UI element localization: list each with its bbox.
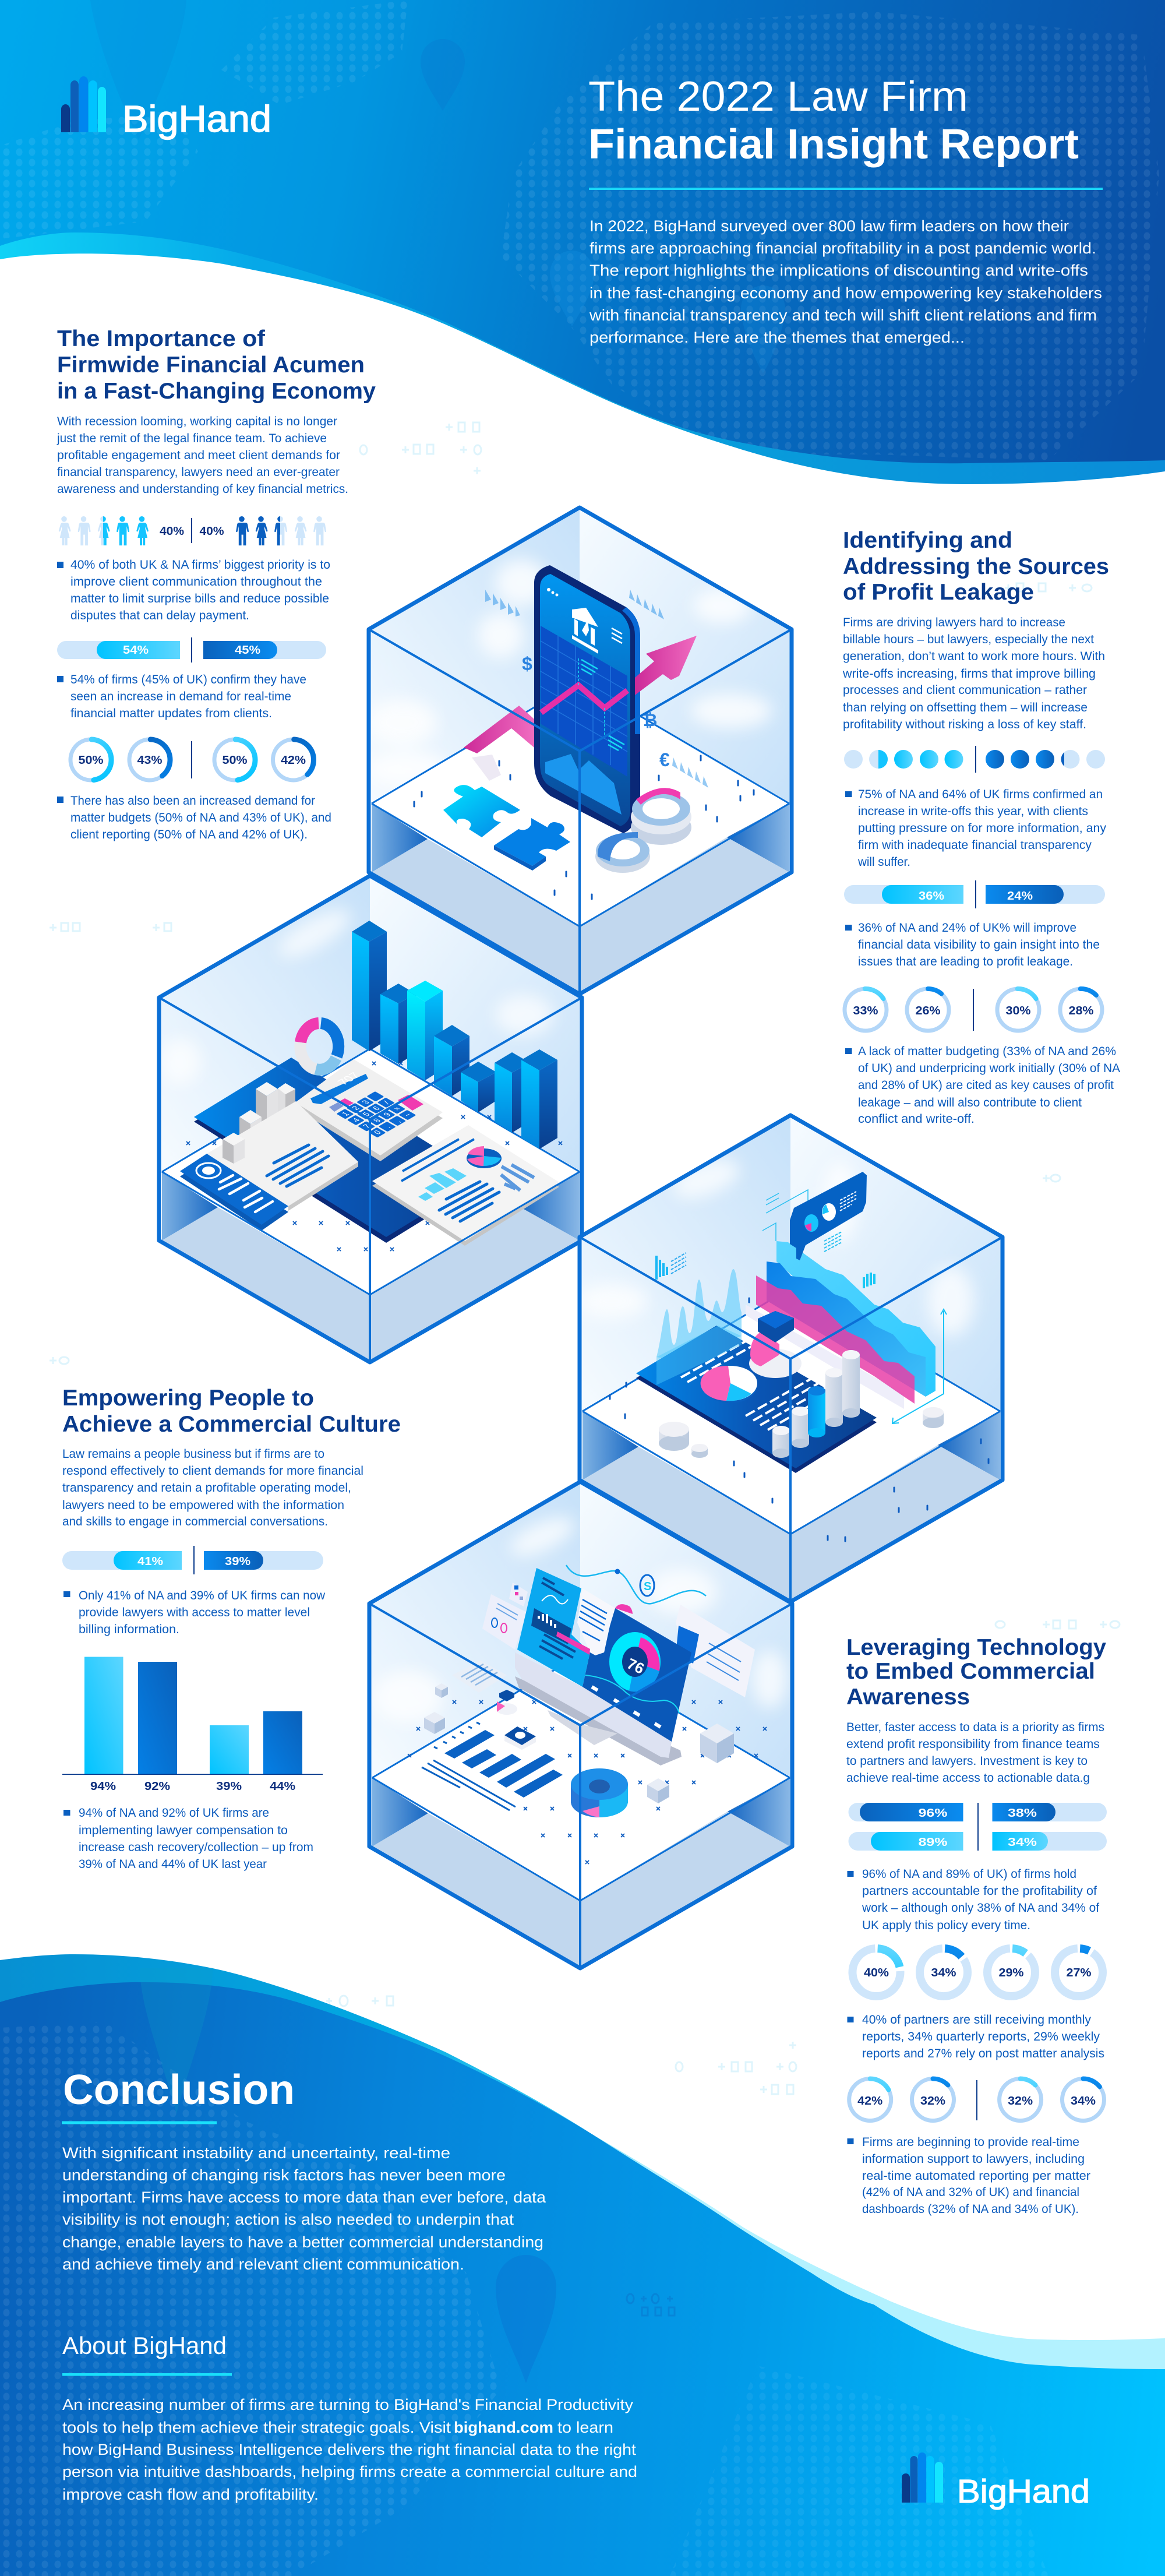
bullet: lawyer compensation: 94% of NA and 92% of UK firms are	[79, 1806, 269, 1820]
bullet: lawyer compensation	[63, 1806, 313, 1871]
heading: Achieve a Commercial Culture	[62, 1412, 401, 1437]
heading	[62, 1386, 401, 1437]
bullet: matter level billing: billing information.	[79, 1623, 179, 1636]
bars 96/89 vs 38/34	[848, 1803, 1107, 1851]
puzzle pieces	[443, 785, 570, 871]
bullet: causes of leakage: A lack of matter budgeting (33% of NA and 26%	[858, 1045, 1116, 1058]
donuts: budgeting and underpricing: 26%	[916, 1005, 941, 1017]
title: Financial Insight Report	[588, 121, 1079, 168]
calculator: −	[402, 1112, 414, 1118]
donuts: budgeting and underpricing	[844, 988, 1103, 1031]
heading	[843, 528, 1109, 605]
column chart: 92%	[144, 1780, 170, 1793]
title rule	[589, 188, 1103, 190]
3D donut	[571, 1768, 628, 1817]
bullet: matter budgets: matter budgets (50% of NA and 43% of UK), and	[70, 811, 331, 824]
heading: to Embed Commercial	[846, 1659, 1095, 1684]
about text: bighand.com	[454, 2419, 553, 2436]
calculator: 1	[340, 1111, 351, 1117]
floor bar chart	[422, 1722, 563, 1810]
logo wordmark: BigHand	[122, 98, 271, 140]
intro text	[846, 1721, 1104, 1785]
intro text: Law remains a people business but if firms are to	[62, 1447, 324, 1461]
intro text: than relying on offsetting them – will increase	[843, 701, 1088, 714]
conclusion text: With significant instability and uncertainty, real-time	[62, 2144, 450, 2162]
intro paragraph: In 2022, BigHand surveyed over 800 law firm leaders on how their	[589, 217, 1069, 235]
right document	[372, 1125, 559, 1246]
conclusion text: and achieve timely and relevant client communication.	[62, 2256, 464, 2273]
logo wordmark: BigHand	[957, 2473, 1090, 2510]
bullet: causes of leakage: conflict and write-off.	[858, 1112, 975, 1126]
column chart: 94%	[90, 1780, 116, 1793]
donuts: report frequency: 27%	[1066, 1967, 1092, 1979]
grey 3D bars	[239, 1082, 295, 1154]
bar 54% vs 45%	[57, 637, 326, 662]
bullet: partner reports: reports and 27% rely on post matter analysis	[862, 2047, 1104, 2060]
bullet: real-time support: (42% of NA and 32% of UK) and financial	[862, 2186, 1079, 2199]
bar 54% vs 45%: 54%	[123, 644, 149, 657]
intro text: generation, don’t want to work more hours. With	[843, 650, 1105, 663]
conclusion rule	[62, 2121, 217, 2124]
title: The 2022 Law Firm	[588, 73, 968, 120]
header white wave	[0, 253, 1165, 2039]
wave line with coin: S	[644, 1580, 651, 1593]
bullet: causes of leakage	[845, 1045, 1120, 1126]
conclusion heading: Conclusion	[63, 2067, 295, 2113]
about text: how BigHand Business Intelligence delivers the right financial data to the right	[62, 2441, 637, 2458]
bullet: matter level billing: Only 41% of NA and 39% of UK firms can now	[79, 1589, 326, 1602]
donuts: budgets and reporting: 50%	[78, 754, 104, 767]
intro paragraph: in the fast-changing economy and how empowering key stakeholders	[589, 284, 1102, 302]
cylinders	[659, 1350, 944, 1458]
donuts: budgets and reporting: 43%	[137, 754, 163, 767]
bullet: partner accountability: work – although only 38% of NA and 34% of	[862, 1901, 1099, 1915]
small wall charts	[656, 1190, 874, 1288]
heading: The Importance of	[57, 326, 266, 351]
donuts: real-time information: 42%	[857, 2095, 882, 2108]
heading: Awareness	[846, 1685, 970, 1710]
bullet: real-time updates: seen an increase in demand for real-time	[70, 690, 291, 703]
decorative marks	[50, 422, 1120, 2094]
bullet: real-time support: real-time automated reporting per matter	[862, 2169, 1090, 2183]
calculator: 5	[361, 1111, 372, 1118]
column chart	[62, 1657, 323, 1793]
donuts: budgets and reporting: 50%	[223, 754, 248, 767]
bars 96/89 vs 38/34: 96%	[918, 1807, 948, 1820]
currency symbols: €	[659, 749, 670, 770]
calculator: .	[383, 1124, 392, 1129]
logo bottom	[902, 2452, 1090, 2510]
speech bubble	[790, 1172, 867, 1260]
donuts: real-time information: 34%	[1071, 2095, 1096, 2108]
donuts: report frequency	[851, 1939, 1112, 2006]
side cards	[482, 1583, 755, 1697]
money note	[504, 1726, 536, 1750]
conclusion text: visibility is not enough; action is also needed to underpin that	[62, 2211, 514, 2228]
about text: person via intuitive dashboards, helping firms create a commercial culture and	[62, 2463, 637, 2480]
bullet: partner reports: reports, 34% quarterly reports, 29% weekly	[862, 2030, 1100, 2043]
donuts: budgets and reporting	[70, 739, 315, 781]
intro text: processes and client communication – rather	[843, 683, 1087, 697]
about text	[62, 2396, 637, 2503]
isometric cube: tablet with layered charts	[578, 1115, 1002, 1602]
bullet: matter budgets: There has also been an increased demand for	[70, 794, 315, 808]
intro paragraph: performance. Here are the themes that emerged...	[589, 329, 965, 346]
intro text: to partners and lawyers. Investment is key to	[846, 1754, 1088, 1768]
bullet: real-time support: dashboards (32% of NA and 34% of UK).	[862, 2203, 1079, 2216]
people pictogram 40%: 40%	[199, 525, 224, 538]
bar 36% vs 24%: 24%	[1007, 890, 1033, 903]
bullet: partner accountability	[847, 1867, 1099, 1932]
logo bars	[61, 76, 106, 132]
about heading: About BigHand	[62, 2332, 227, 2359]
calculator: 9	[381, 1111, 393, 1118]
calculator: 0	[372, 1129, 383, 1136]
panel: commercial culture	[62, 1386, 401, 1871]
footer background	[0, 1968, 1165, 2576]
bullet: client communication: disputes that can delay payment.	[70, 609, 249, 622]
bullet: write-offs	[845, 788, 1107, 869]
about rule	[62, 2373, 232, 2376]
isometric cube: bar charts and calculator	[159, 876, 582, 1362]
about text: to learn	[557, 2419, 613, 2436]
bullet: causes of leakage: of UK) and underpricing work initially (30% of NA	[858, 1062, 1120, 1075]
pink arrow head	[635, 636, 697, 695]
title	[588, 73, 1079, 168]
bar 36% vs 24%	[844, 880, 1105, 908]
donuts: real-time information: 32%	[920, 2095, 945, 2108]
calculator: 7	[361, 1123, 372, 1129]
bullet: matter level billing	[63, 1589, 326, 1636]
bar 54% vs 45%: 45%	[235, 644, 260, 657]
bullet: data visibility	[845, 921, 1100, 968]
bullet: matter level billing: provide lawyers with access to matter level	[79, 1606, 310, 1619]
intro paragraph	[589, 217, 1102, 346]
stacked rings	[595, 788, 691, 873]
bullet: lawyer compensation: increase cash recovery/collection – up from	[79, 1841, 313, 1854]
bullet: lawyer compensation: implementing lawyer compensation to	[79, 1824, 288, 1837]
column chart: 39%	[216, 1780, 242, 1793]
left document	[180, 1101, 358, 1231]
donuts: budgeting and underpricing: 33%	[853, 1005, 878, 1017]
currency symbols	[522, 653, 670, 770]
conclusion text: understanding of changing risk factors has never been more	[62, 2166, 506, 2184]
heading: Addressing the Sources	[843, 554, 1109, 579]
axis arrows	[892, 1309, 947, 1423]
intro text: write-offs increasing, firms that improve billing	[842, 667, 1096, 681]
bullet: client communication: improve client communication throughout the	[70, 575, 322, 589]
intro text: respond effectively to client demands for more financial	[62, 1464, 363, 1478]
bullet: real-time support	[847, 2135, 1090, 2216]
heading: in a Fast-Changing Economy	[57, 379, 376, 404]
panel: technology	[846, 1635, 1112, 2216]
calculator: 2	[350, 1105, 361, 1111]
header background	[0, 0, 1165, 524]
intro paragraph: The report highlights the implications of discounting and write-offs	[589, 262, 1088, 279]
intro text: achieve real-time access to actionable data.g	[846, 1771, 1090, 1785]
intro text: financial transparency, lawyers need an ever-greater	[57, 466, 340, 479]
grey cubes	[424, 1683, 734, 1803]
dots 75% vs 64%	[844, 746, 1105, 773]
donuts: real-time information: 32%	[1008, 2095, 1033, 2108]
bullet: causes of leakage: leakage – and will also contribute to client	[858, 1096, 1082, 1109]
donuts: budgeting and underpricing: 28%	[1068, 1005, 1094, 1017]
bullet: partner accountability: partners accountable for the profitability of	[862, 1884, 1097, 1898]
donuts: report frequency: 34%	[931, 1967, 956, 1979]
calculator: /	[382, 1100, 391, 1105]
panel: profit leakage	[842, 528, 1120, 1126]
isometric cube: monitor dashboard	[369, 1482, 792, 1968]
phone	[534, 565, 640, 833]
heading	[57, 326, 376, 404]
bar 41% vs 39%	[62, 1546, 323, 1574]
calculator: 6	[370, 1105, 382, 1112]
small triangles	[485, 590, 708, 788]
bullet: matter budgets	[57, 794, 331, 841]
people pictogram 40%	[59, 516, 326, 545]
donuts: report frequency: 40%	[864, 1967, 889, 1979]
bar 36% vs 24%: 36%	[919, 890, 944, 903]
intro paragraph: firms are approaching financial profitability in a post pandemic world.	[589, 239, 1096, 257]
bullet: partner accountability: 96% of NA and 89% of UK) of firms hold	[862, 1867, 1076, 1881]
tablet	[636, 1326, 877, 1473]
bullet: client communication	[57, 558, 330, 622]
bullet: write-offs: putting pressure on for more information, any	[858, 822, 1107, 835]
translucent peak chart	[656, 1269, 742, 1360]
intro text: transparency and retain a profitable operating model,	[62, 1481, 351, 1495]
calculator	[295, 1059, 443, 1161]
intro text	[57, 415, 348, 496]
bars 96/89 vs 38/34: 89%	[918, 1836, 948, 1849]
heading: of Profit Leakage	[843, 580, 1034, 605]
intro text	[62, 1447, 363, 1528]
footer wave band	[0, 1954, 1165, 2447]
bullet: partner reports	[847, 2013, 1104, 2060]
wave line with coin	[566, 1565, 706, 1604]
people pictogram 40%: 40%	[160, 525, 184, 538]
donuts: real-time information	[849, 2079, 1104, 2121]
layered area charts	[746, 1241, 935, 1409]
floor marks	[186, 1062, 562, 1251]
tablet base	[194, 1058, 483, 1243]
donuts: budgeting and underpricing: 30%	[1005, 1005, 1031, 1017]
logo top	[61, 76, 271, 140]
heading: Identifying and	[843, 528, 1012, 553]
calculator: ×	[391, 1105, 403, 1112]
about text: improve cash flow and profitability.	[62, 2486, 319, 2503]
calculator: 8	[371, 1117, 383, 1123]
intro text: and skills to engage in commercial conversations.	[62, 1515, 328, 1528]
bullet: write-offs: increase in write-offs this year, with clients	[858, 805, 1088, 818]
floor ticks	[414, 756, 754, 899]
about text: An increasing number of firms are turning to BigHand's Financial Productivity	[62, 2396, 634, 2413]
calculator: 707	[335, 1071, 363, 1087]
intro text: profitability without risking a loss of key staff.	[843, 718, 1086, 731]
bullet: real-time updates: financial matter updates from clients.	[70, 707, 272, 720]
intro text: With recession looming, working capital is no longer	[57, 415, 337, 428]
floor marks	[408, 1700, 767, 1864]
monitor	[515, 1568, 691, 1766]
logo bars	[902, 2452, 943, 2503]
intro text: just the remit of the legal finance team. To achieve	[57, 432, 327, 445]
small pie and paper	[452, 1661, 517, 1715]
bar 41% vs 39%: 41%	[137, 1555, 163, 1568]
header wave bands	[0, 232, 1165, 524]
bullet: real-time support: information support to lawyers, including	[862, 2152, 1085, 2166]
about text: tools to help them achieve their strategic goals. Visit	[62, 2419, 451, 2436]
heading: Leveraging Technology	[846, 1635, 1106, 1660]
panel: firmwide financial acumen	[57, 326, 376, 841]
pink arrow tail	[464, 706, 534, 753]
bullet: matter budgets: client reporting (50% of NA and 42% of UK).	[70, 828, 308, 841]
calculator: ,	[393, 1118, 403, 1123]
bullet: partner accountability: UK apply this policy every time.	[862, 1919, 1030, 1932]
intro text: lawyers need to be empowered with the information	[62, 1499, 344, 1512]
heading: Empowering People to	[62, 1386, 314, 1411]
bullet: client communication: matter to limit surprise bills and reduce possible	[70, 592, 329, 605]
intro text	[842, 616, 1105, 731]
bullet: real-time updates	[57, 673, 306, 720]
isometric cube: phone with rising arrow	[367, 508, 792, 994]
bars 96/89 vs 38/34: 34%	[1008, 1836, 1037, 1849]
bullet: write-offs: firm with inadequate financial transparency	[858, 838, 1092, 852]
donuts: report frequency: 29%	[998, 1967, 1024, 1979]
bullet: causes of leakage: and 28% of UK) are cited as key causes of profit	[858, 1079, 1114, 1092]
heading	[846, 1635, 1106, 1710]
conclusion text: important. Firms have access to more data than ever before, data	[62, 2189, 546, 2206]
bullet: data visibility: issues that are leading to profit leakage.	[858, 955, 1073, 968]
conclusion text: change, enable layers to have a better commercial understanding	[62, 2233, 543, 2251]
pie charts	[701, 1311, 802, 1403]
floating donut	[301, 1023, 338, 1070]
calculator: 3	[360, 1099, 371, 1105]
heading: Firmwide Financial Acumen	[57, 353, 365, 378]
conclusion text	[62, 2144, 546, 2273]
currency symbols: ₿	[643, 711, 657, 730]
bullet: client communication: 40% of both UK & NA firms’ biggest priority is to	[70, 558, 330, 572]
intro text: Firms are driving lawyers hard to increase	[843, 616, 1065, 629]
bullet: write-offs: 75% of NA and 64% of UK firms confirmed an	[858, 788, 1103, 801]
intro text: awareness and understanding of key financial metrics.	[57, 482, 348, 496]
bullet: write-offs: will suffer.	[857, 855, 910, 869]
3D bar chart	[352, 921, 557, 1149]
bullet: partner reports: 40% of partners are still receiving monthly	[862, 2013, 1092, 2027]
currency symbols: $	[522, 653, 532, 674]
intro paragraph: with financial transparency and tech will shift client relations and firm	[589, 306, 1097, 324]
bar 41% vs 39%: 39%	[225, 1555, 250, 1568]
bullet: real-time updates: 54% of firms (45% of UK) confirm they have	[70, 673, 306, 686]
intro text: extend profit responsibility from finance teams	[846, 1738, 1100, 1751]
intro text: profitable engagement and meet client demands for	[57, 449, 340, 462]
bullet: data visibility: financial data visibility to gain insight into the	[858, 938, 1100, 952]
bullet: real-time support: Firms are beginning to provide real-time	[862, 2135, 1079, 2149]
floor ticks	[610, 1298, 989, 1541]
calculator: 4	[351, 1116, 362, 1123]
bullet: data visibility: 36% of NA and 24% of UK% will improve	[858, 921, 1076, 935]
intro text: Better, faster access to data is a priority as firms	[846, 1721, 1104, 1734]
monitor: 76	[624, 1655, 647, 1678]
bullet: lawyer compensation: 39% of NA and 44% of UK last year	[79, 1858, 267, 1871]
column chart: 44%	[270, 1780, 295, 1793]
intro text: billable hours – but lawyers, especially the next	[843, 633, 1094, 646]
donuts: budgets and reporting: 42%	[281, 754, 306, 767]
bars 96/89 vs 38/34: 38%	[1008, 1807, 1037, 1820]
